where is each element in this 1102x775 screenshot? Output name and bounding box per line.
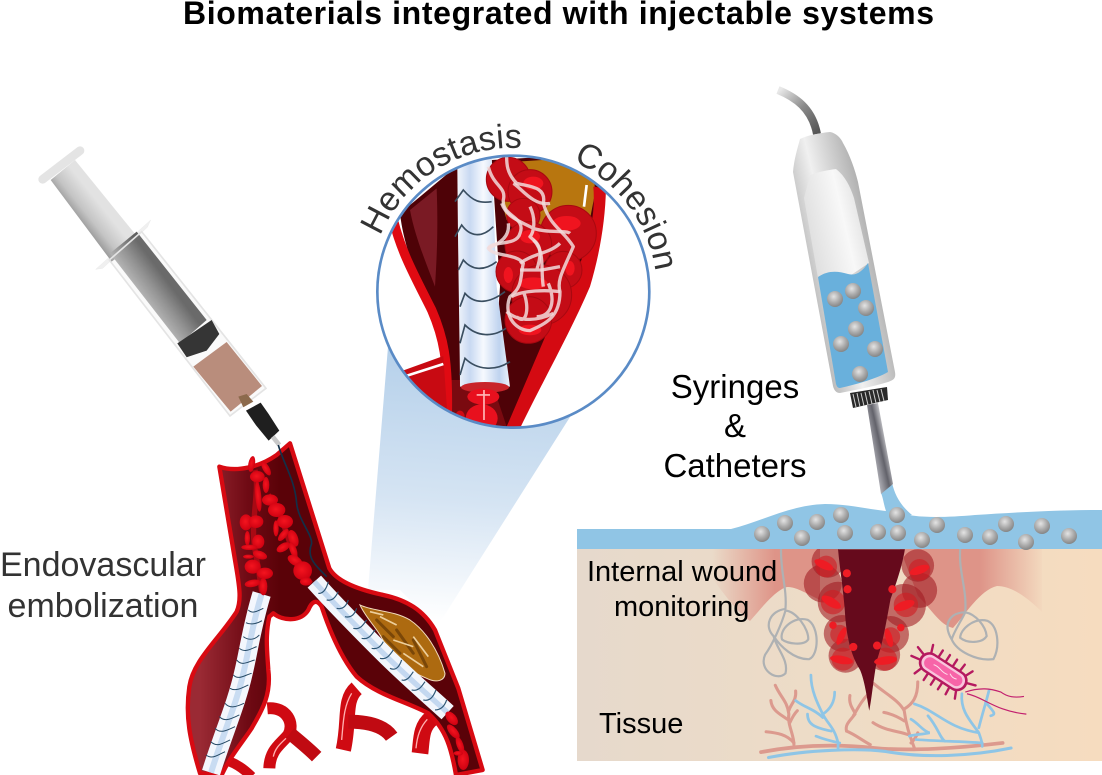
label: Endovascular embolization: embolization bbox=[8, 587, 198, 625]
tissue background bbox=[577, 549, 1102, 761]
nozzle bbox=[246, 403, 279, 441]
plunger rod bbox=[51, 160, 140, 262]
piston bbox=[177, 320, 219, 357]
barrel flange bbox=[96, 220, 151, 269]
biomaterial stream bbox=[881, 483, 912, 520]
needle tip bbox=[273, 437, 279, 445]
polymer coil left bbox=[764, 549, 817, 676]
clot cells bbox=[486, 157, 596, 343]
label: Syringes & Catheters: & bbox=[724, 407, 746, 444]
icon: injector pen bbox=[778, 90, 895, 494]
icon: syringe bbox=[43, 151, 279, 445]
biomaterial layer bbox=[577, 504, 1102, 549]
clot highlights bbox=[813, 557, 930, 666]
label: Endovascular embolization: Endovascular bbox=[0, 546, 206, 584]
left stent bbox=[206, 594, 263, 773]
cable bbox=[778, 90, 817, 134]
vessels: blue bbox=[768, 675, 1011, 758]
pen liquid bbox=[818, 263, 888, 388]
pen window bbox=[804, 169, 869, 278]
guide wire bbox=[278, 445, 327, 577]
magnified lens bbox=[377, 153, 649, 432]
drug contents bbox=[193, 342, 262, 412]
stent bbox=[457, 155, 510, 387]
label: Syringes & Catheters: Catheters bbox=[663, 447, 807, 484]
bacterium bbox=[904, 638, 982, 705]
lower branch bbox=[404, 356, 447, 409]
grip bbox=[850, 387, 888, 408]
beads bbox=[754, 507, 1077, 550]
panel: tissue bbox=[577, 483, 1102, 761]
lower lumen bbox=[452, 380, 508, 426]
barrel bbox=[109, 232, 266, 416]
plunger flange bbox=[43, 151, 80, 179]
clot bbox=[804, 545, 937, 673]
right wall bbox=[507, 187, 606, 428]
red blood cells bbox=[240, 456, 469, 770]
artery illustration bbox=[188, 443, 483, 775]
left wall bbox=[393, 220, 447, 413]
label: Hemostasis: Hemostasis bbox=[360, 124, 520, 234]
inflammation right bbox=[900, 549, 1042, 628]
right stent bbox=[314, 582, 448, 713]
label: Syringes & Catheters: Syringes bbox=[671, 368, 799, 405]
zoom cone bbox=[368, 347, 570, 627]
clot cores bbox=[815, 556, 930, 671]
label: Tissue: Tissue bbox=[599, 708, 683, 740]
label: Cohesion: Cohesion bbox=[578, 144, 672, 270]
left lumen bbox=[400, 163, 460, 387]
pen body bbox=[793, 132, 895, 393]
plaque and right lumen bbox=[492, 153, 607, 427]
blood streams bbox=[254, 470, 311, 592]
wound bbox=[838, 549, 905, 711]
inflammation left bbox=[712, 549, 820, 621]
vessel wall and lumen bbox=[188, 443, 483, 775]
lens contents bbox=[393, 153, 607, 432]
pen beads bbox=[827, 283, 883, 382]
label: Internal wound monitoring: monitoring bbox=[614, 591, 749, 623]
needle bbox=[867, 403, 893, 494]
lens ring bbox=[377, 156, 649, 428]
stent tip and blood bbox=[461, 382, 509, 393]
label: Internal wound monitoring: Internal wound bbox=[587, 556, 777, 588]
plaque bbox=[360, 605, 445, 681]
flagella bbox=[965, 689, 1026, 714]
hydrogel mesh bbox=[488, 157, 573, 331]
vessels: pink bbox=[761, 682, 1003, 752]
side branches bbox=[230, 688, 432, 775]
polymer coil right bbox=[948, 549, 997, 659]
lens background bbox=[377, 156, 649, 428]
